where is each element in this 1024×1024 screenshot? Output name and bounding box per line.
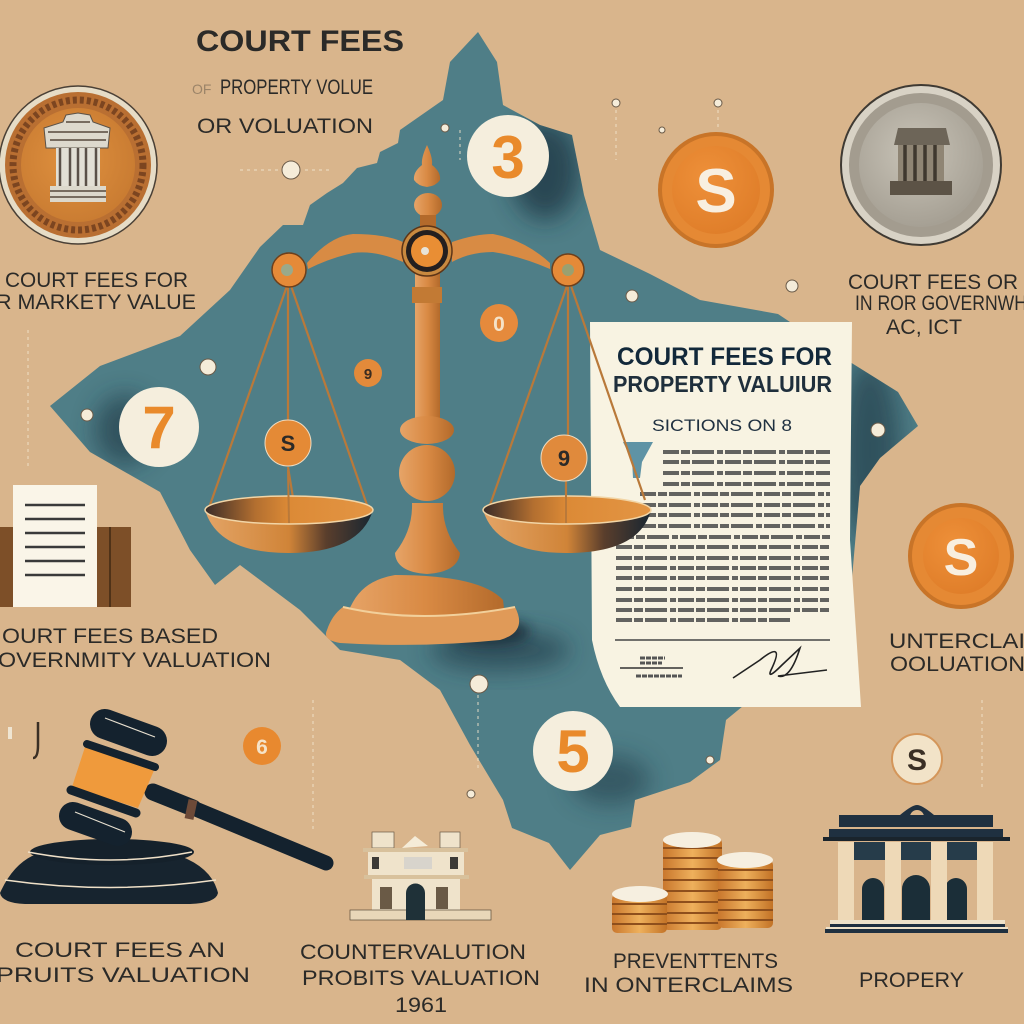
sound block [0, 849, 218, 904]
head [105, 724, 152, 741]
label: countervaluation: COUNTERVALUTION [300, 941, 526, 964]
document [590, 322, 861, 707]
coin badge S top right [658, 132, 774, 248]
balance scale: 9 [558, 446, 570, 471]
balance scale: S [281, 431, 295, 456]
small coin badge 9: 9 [364, 366, 372, 383]
small coin badge bottom: S [907, 744, 927, 777]
label: market value: COURT FEES FOR [5, 269, 188, 292]
balance scale [205, 145, 651, 645]
label: market value [0, 269, 196, 314]
label: profits valuation: PRUITS VALUATION [0, 964, 250, 987]
document: COURT FEES FOR [617, 343, 832, 371]
beam end left [272, 253, 306, 287]
right chains [490, 283, 645, 520]
label: countervaluation: PROBITS VALUATION [302, 967, 540, 990]
base shadow [450, 619, 530, 645]
label: market value: R MARKETY VALUE [0, 291, 196, 314]
number badge 7: 7 [142, 394, 176, 461]
title: COURT FEES [196, 25, 404, 58]
icon: courthouse [823, 805, 1010, 933]
small dots [81, 99, 885, 798]
label: countervaluation: 1961 [395, 994, 447, 1017]
guide lines [28, 110, 982, 830]
label: counterclaim: OOLUATION [890, 653, 1024, 676]
handle [153, 792, 193, 808]
beam right [452, 234, 550, 269]
document: SICTIONS ON 8 [652, 416, 792, 435]
finial [414, 145, 440, 187]
right pan [483, 510, 651, 553]
label: government act [848, 271, 1024, 339]
icon: document stack [0, 485, 131, 607]
small coin badge 9 [354, 359, 382, 387]
small coin badge 6: 6 [256, 736, 268, 759]
title [192, 25, 404, 138]
label: counterclaims [584, 950, 793, 997]
document body lines [616, 452, 830, 620]
title: PROPERTY VOLUE [220, 76, 373, 99]
small coin badge 6 [243, 727, 281, 765]
label: profits valuation: COURT FEES AN [15, 939, 225, 962]
map of state [50, 32, 918, 870]
coin badge S right: S [944, 529, 978, 587]
small coin badge bottom [892, 734, 942, 784]
label: government valuation: OURT FEES BASED [2, 625, 218, 648]
icon: coin stacks [612, 832, 773, 933]
label: counterclaim: UNTERCLAI [889, 630, 1024, 653]
coin badge S right [908, 503, 1014, 609]
label: counterclaim [889, 630, 1024, 676]
label: counterclaims: IN ONTERCLAIMS [584, 974, 793, 997]
beam left [307, 234, 403, 269]
number badge 5 [533, 711, 613, 791]
coin: emblem left [0, 86, 157, 244]
small coin badge centre: 0 [493, 313, 505, 336]
coin: emblem right [841, 85, 1001, 245]
title: OR VOLUATION [197, 115, 373, 138]
coin badge S top right: S [695, 157, 737, 226]
label: counterclaims: PREVENTTENTS [613, 950, 778, 973]
document: PROPERTY VALUIUR [613, 371, 832, 397]
icon: mansion [350, 832, 491, 920]
left pan [205, 510, 373, 553]
number badge 7 [119, 387, 199, 467]
left S token [265, 420, 311, 466]
signature right [733, 648, 827, 678]
label: government valuation [0, 625, 271, 672]
document illustration [623, 442, 653, 478]
icon: ornament marks [8, 722, 38, 758]
pillar [415, 270, 440, 420]
number badge 5: 5 [556, 718, 590, 785]
label: property: PROPERY [859, 969, 964, 992]
label: government act: AC, ICT [886, 316, 962, 339]
base [345, 575, 505, 617]
beam end right [552, 254, 584, 286]
icon: gavel [0, 718, 326, 904]
label: countervaluation [300, 941, 540, 1017]
central hub [402, 226, 452, 276]
small coin badge centre [480, 304, 518, 342]
left chains [210, 283, 367, 510]
label: government act: COURT FEES OR [848, 271, 1018, 294]
signature left [620, 658, 683, 676]
label: profits valuation [0, 939, 250, 987]
title: OF [192, 81, 211, 97]
right S token [541, 435, 587, 481]
number badge 3 [467, 115, 549, 197]
label: government valuation: OVERNMITY VALUATION [0, 649, 271, 672]
number badge 3: 3 [491, 124, 525, 191]
